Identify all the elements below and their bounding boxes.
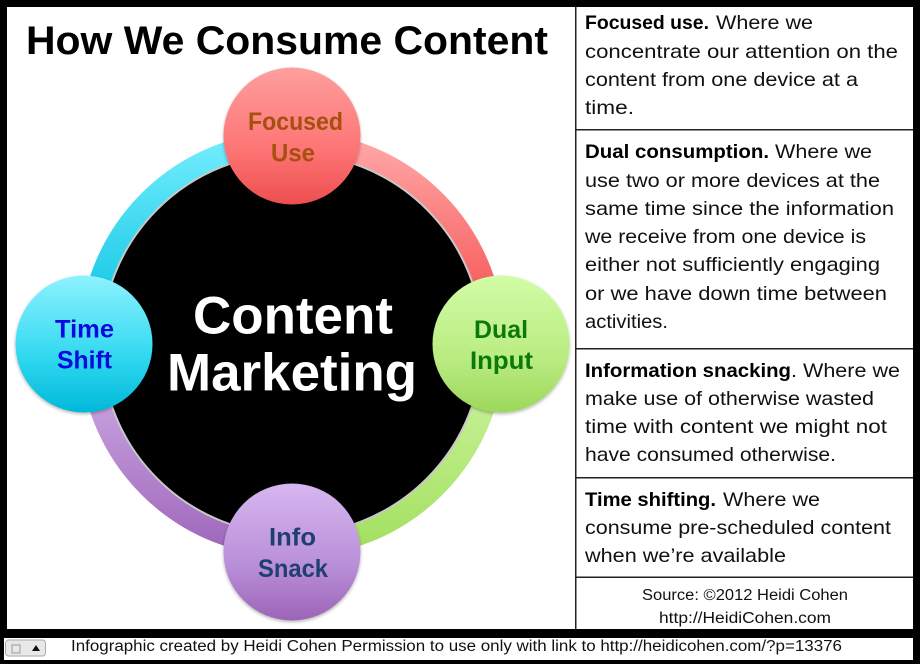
text: source xyxy=(642,587,848,627)
text: focused use: content from one device at a xyxy=(585,69,858,91)
text: dual consumption: use two or more devices at the xyxy=(585,170,880,192)
bubble: info snack xyxy=(224,484,360,620)
text: focused use: Focused use. xyxy=(585,12,709,34)
text: time shifting: Time shifting. xyxy=(585,489,716,511)
text: information snacking: time with content we might not xyxy=(585,416,888,438)
center label xyxy=(167,286,417,402)
title: How We Consume Content xyxy=(26,19,548,63)
text: information snacking xyxy=(585,360,900,466)
text: information snacking: . Where we xyxy=(791,360,900,382)
bubble: info snack: Snack xyxy=(258,555,328,583)
bubble: dual input xyxy=(432,276,570,412)
center label: Marketing xyxy=(167,344,417,402)
text: information snacking: make use of otherwise wasted xyxy=(585,388,874,410)
footer bar xyxy=(4,638,913,660)
ring arc: cyan xyxy=(90,142,292,344)
bubble: dual input: Input xyxy=(470,347,534,375)
bubble: dual input: Dual xyxy=(474,316,528,344)
text: dual consumption xyxy=(584,141,894,333)
ring arc: red xyxy=(292,142,494,344)
text: dual consumption: activities. xyxy=(585,311,668,333)
ring arc: green xyxy=(292,344,494,546)
text: source: Source: ©2012 Heidi Cohen xyxy=(642,587,848,604)
chart: content marketing cycle xyxy=(16,68,570,620)
text: time shifting: Where we xyxy=(723,489,820,511)
text: focused use xyxy=(585,12,898,119)
text: dual consumption: Where we xyxy=(775,141,872,163)
bubble: focused use: Focused xyxy=(248,108,343,136)
ring arc: purple xyxy=(90,344,292,546)
bubble: time shift xyxy=(16,276,152,412)
footer credit text: Infographic created by Heidi Cohen Permission to use only with link to http://heidicohen.com/?p=13376 xyxy=(71,638,842,655)
text: source: http://HeidiCohen.com xyxy=(659,610,831,627)
icon: viewer control button xyxy=(6,640,46,656)
text: focused use: time. xyxy=(585,97,634,119)
bubble: focused use xyxy=(224,68,360,204)
text: dual consumption: Dual consumption. xyxy=(585,141,769,163)
text: information snacking: Information snacking xyxy=(585,360,791,382)
bubble: info snack: Info xyxy=(269,524,316,552)
text: information snacking: have consumed otherwise. xyxy=(585,444,836,466)
text: dual consumption: either not sufficiently engaging xyxy=(585,254,880,276)
text: dual consumption: we receive from one device is xyxy=(584,226,866,248)
text: dual consumption: or we have down time between xyxy=(585,283,887,305)
panel: definitions table xyxy=(575,7,913,629)
text: time shifting: when we’re available xyxy=(584,545,786,567)
central black circle xyxy=(102,154,482,534)
text: dual consumption: same time since the information xyxy=(585,198,894,220)
center label: Content xyxy=(193,286,393,346)
text: focused use: Where we xyxy=(716,12,813,34)
bubble: time shift: Time xyxy=(55,316,114,344)
text: focused use: concentrate our attention on the xyxy=(585,41,898,63)
panel: diagram area xyxy=(7,7,575,629)
bubble: focused use: Use xyxy=(271,140,315,168)
text: time shifting: consume pre-scheduled content xyxy=(585,517,892,539)
text: time shifting xyxy=(584,489,892,567)
bubble: time shift: Shift xyxy=(57,346,113,374)
